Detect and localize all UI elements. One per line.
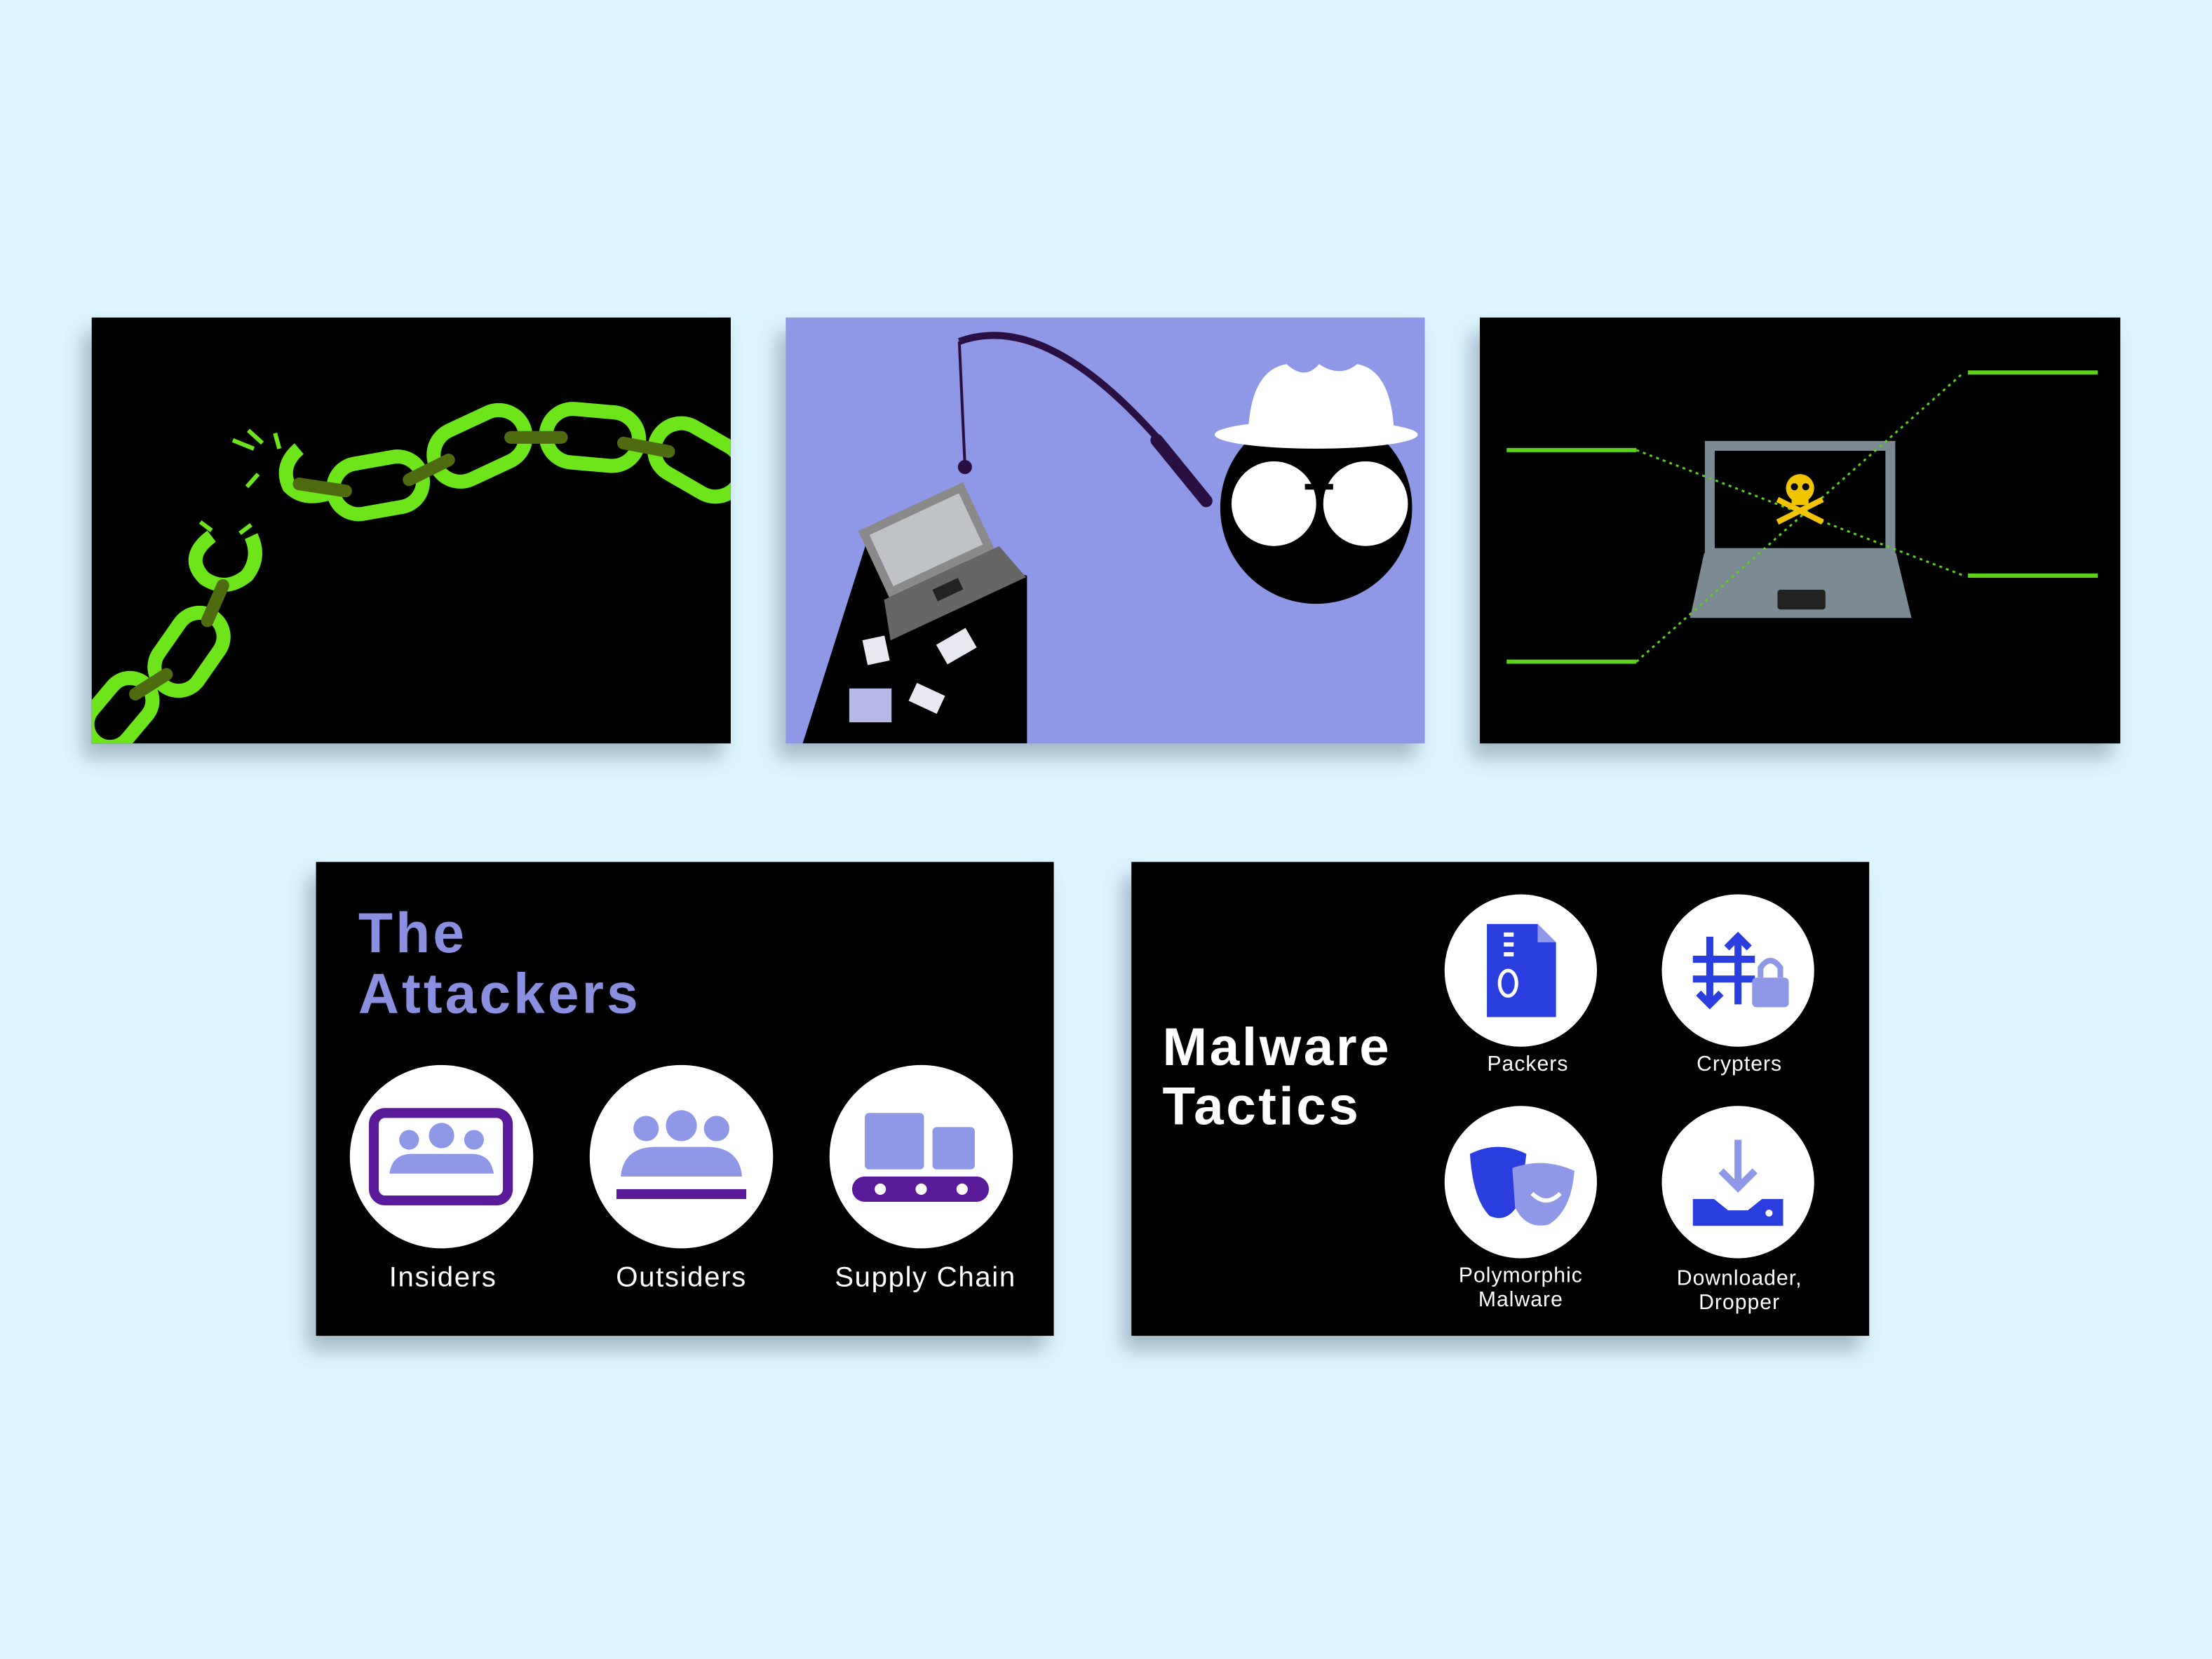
fishing rod [959, 335, 1206, 501]
icon: outsiders [590, 1065, 773, 1248]
labels: Outsiders [616, 1261, 747, 1293]
hacker [1220, 412, 1412, 604]
heading [1162, 1017, 1391, 1136]
heading: The [358, 902, 467, 965]
labels [1459, 1052, 1802, 1314]
panel: infected laptop [1480, 318, 2120, 743]
icon: insiders [350, 1065, 533, 1248]
labels: Packers [1487, 1052, 1568, 1076]
laptop [1710, 446, 1890, 553]
panel: phishing [785, 318, 1425, 743]
labels: Malware [1478, 1288, 1563, 1311]
data funnel [803, 539, 1027, 743]
icon: packers [1445, 895, 1597, 1047]
icon: supply chain [830, 1065, 1013, 1248]
heading: Attackers [358, 962, 641, 1025]
labels: Downloader, [1677, 1267, 1802, 1290]
icon: skull [1777, 474, 1823, 522]
labels: Crypters [1697, 1052, 1782, 1076]
labels: Supply Chain [835, 1261, 1016, 1293]
heading [358, 902, 641, 1025]
labels: Dropper [1699, 1291, 1780, 1314]
connectors [135, 438, 668, 694]
chain links [78, 401, 752, 756]
panel: the attackers [316, 862, 1054, 1336]
labels: Insiders [389, 1261, 497, 1293]
panel: broken chain [78, 318, 752, 756]
icon: downloader [1662, 1106, 1814, 1258]
break sparks [201, 431, 279, 534]
stolen files [849, 628, 977, 722]
heading: Malware [1162, 1017, 1391, 1077]
laptop hooked [843, 475, 1026, 640]
labels: Polymorphic [1459, 1264, 1583, 1287]
network lines [1506, 372, 2098, 662]
icon: polymorphic [1445, 1106, 1597, 1258]
labels [389, 1261, 1016, 1293]
heading: Tactics [1162, 1076, 1361, 1136]
icon: crypters [1662, 895, 1814, 1047]
panel: malware tactics [1131, 862, 1869, 1336]
